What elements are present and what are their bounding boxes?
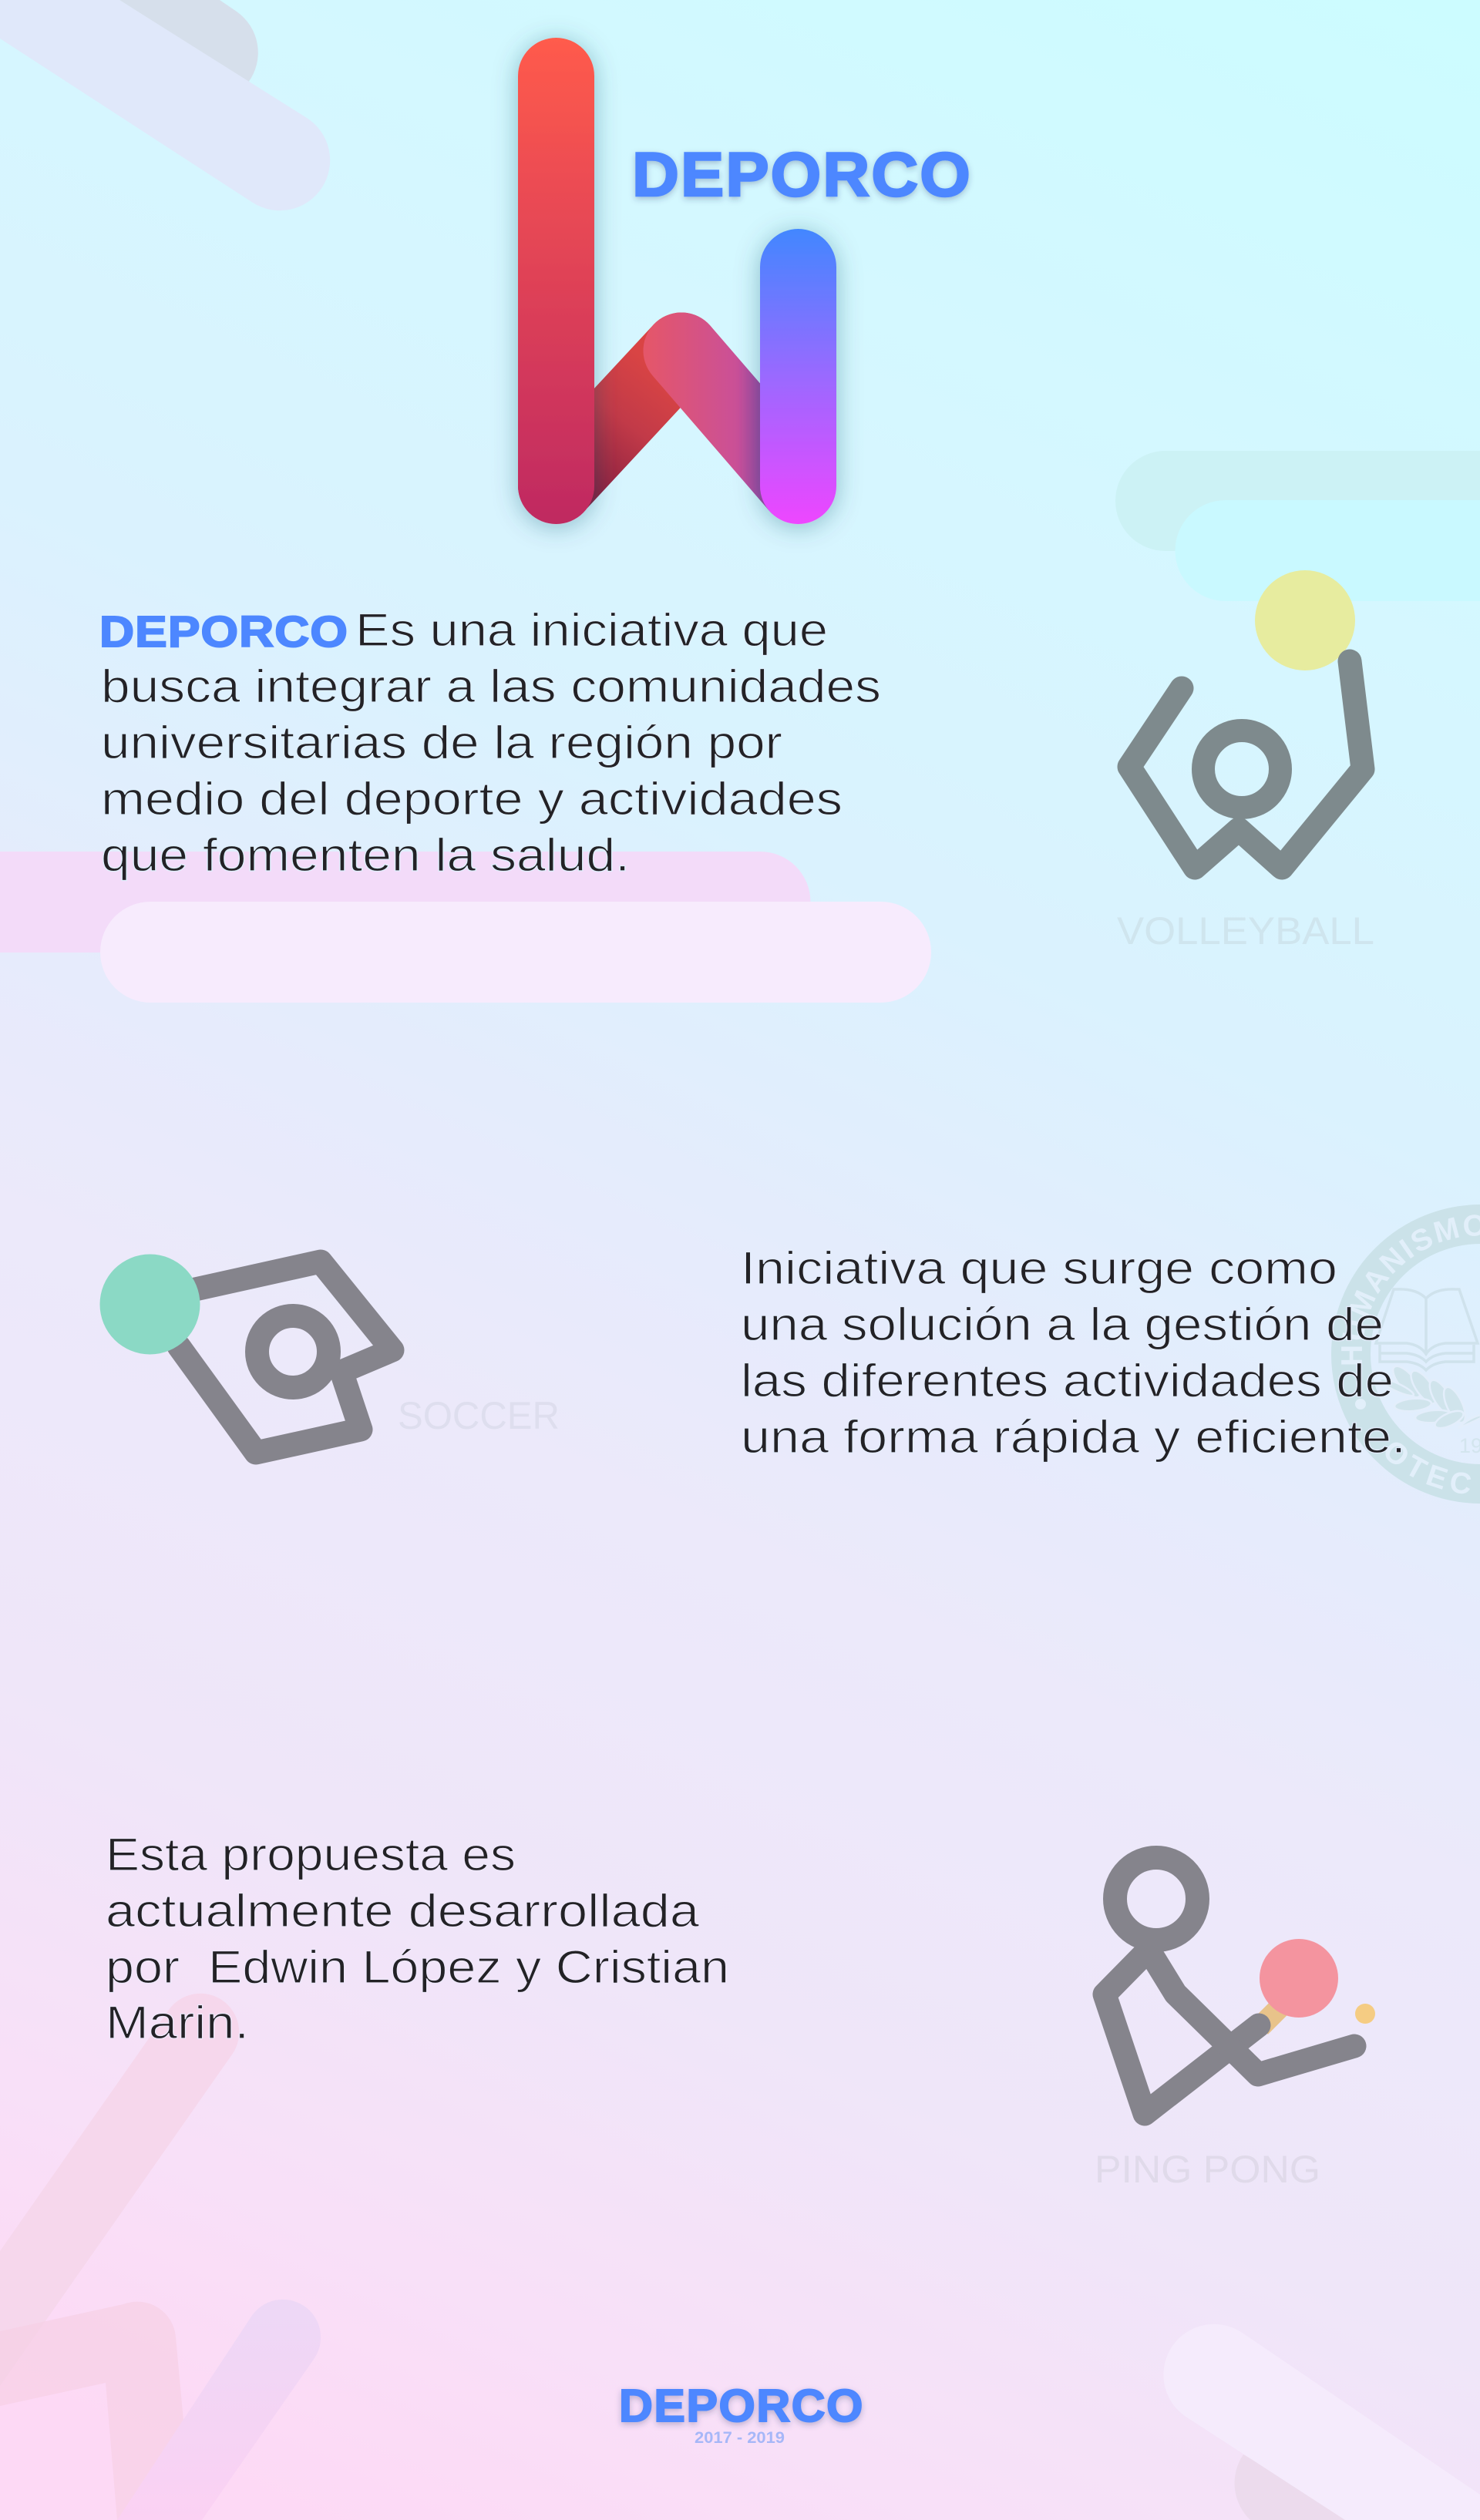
footer — [619, 2381, 864, 2447]
soccer figure — [179, 1262, 392, 1453]
decorative shapes: bottom left — [0, 1994, 321, 2520]
third text block — [106, 1829, 729, 2048]
racket handle — [1260, 1992, 1295, 2027]
second text block: una forma rápida y eficiente. — [741, 1411, 1406, 1463]
icon: volleyball player — [1117, 570, 1374, 953]
logo left bar — [518, 38, 594, 524]
volleyball label: VOLLEYBALL — [1117, 909, 1374, 953]
decorative pills: top left — [0, 0, 330, 210]
intro text block: busca integrar a las comunidades — [101, 660, 881, 712]
decorative pills: top right — [1115, 451, 1480, 601]
ping pong ball — [1355, 2004, 1375, 2024]
logo wordmark: DEPORCO — [632, 140, 972, 210]
intro text block: medio del deporte y actividades — [101, 773, 843, 825]
logo left diagonal — [557, 351, 681, 486]
third text block: por Edwin López y Cristian — [106, 1941, 729, 1993]
footer years: 2017 - 2019 — [695, 2429, 785, 2447]
volleyball figure — [1129, 661, 1363, 868]
decorative shapes: bottom right — [1163, 2324, 1480, 2520]
soccer ball — [100, 1255, 200, 1355]
footer wordmark: DEPORCO — [619, 2381, 864, 2431]
second text block: Iniciativa que surge como — [741, 1242, 1337, 1294]
seal watermark — [1331, 1205, 1480, 1504]
ping pong figure — [1105, 1857, 1354, 2114]
seal dot — [1355, 1399, 1366, 1410]
seal ring — [1350, 1224, 1480, 1484]
third text block: actualmente desarrollada — [106, 1885, 700, 1937]
intro text block: Es una iniciativa que — [355, 604, 828, 656]
intro text block — [99, 604, 881, 881]
logo right bar — [760, 229, 836, 524]
logo right diagonal — [681, 351, 798, 486]
logo mark — [518, 38, 836, 524]
seal laurel — [1378, 1362, 1480, 1432]
volleyball ball — [1255, 570, 1355, 670]
ping pong label: PING PONG — [1095, 2148, 1320, 2191]
second text block: las diferentes actividades de — [741, 1355, 1394, 1406]
intro text block: DEPORCO — [99, 607, 348, 657]
third text block: Marin. — [106, 1997, 249, 2048]
icon: soccer player — [100, 1255, 560, 1453]
second text block: una solución a la gestión de — [741, 1299, 1384, 1350]
soccer label: SOCCER — [398, 1394, 560, 1437]
decorative pills: behind intro text — [0, 852, 931, 1003]
racket head — [1260, 1939, 1338, 2018]
third text block: Esta propuesta es — [106, 1829, 516, 1880]
seal lower text: OTEC — [1386, 1443, 1471, 1494]
second text block — [741, 1242, 1406, 1463]
seal book — [1376, 1289, 1478, 1370]
intro text block: universitarias de la región por — [101, 717, 782, 768]
icon: ping pong player — [1095, 1857, 1375, 2191]
intro text block: que fomenten la salud. — [101, 829, 630, 881]
